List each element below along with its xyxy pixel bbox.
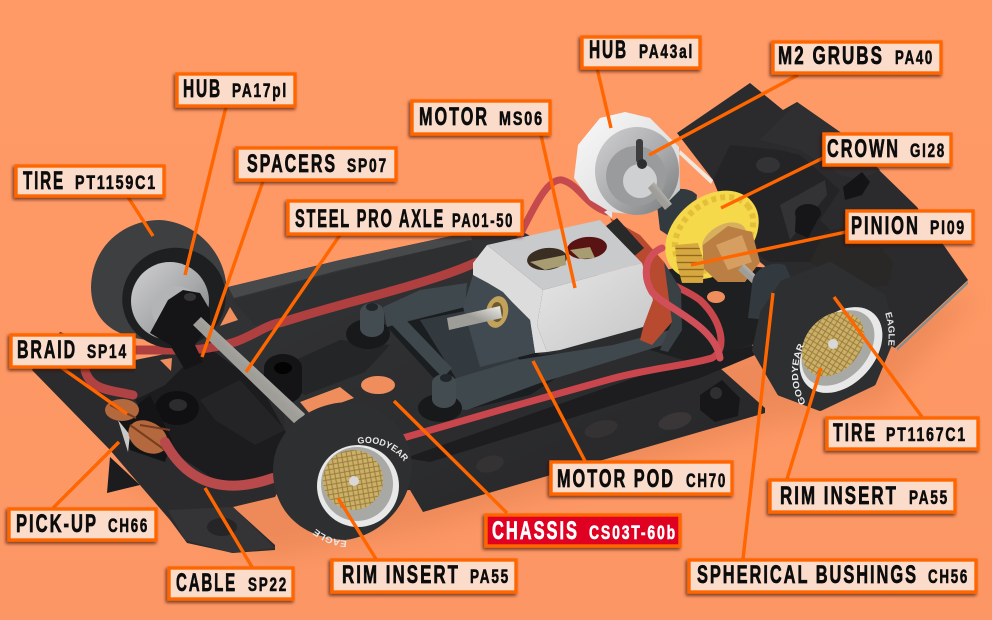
left bushing: [657, 189, 697, 238]
label: rim insert left: RIM INSERT: [342, 561, 460, 589]
front axle stub: [738, 264, 762, 287]
post with hole: [264, 354, 302, 404]
leader: crown: [721, 158, 823, 208]
leader: tire PT1159C1: [128, 197, 153, 236]
label: rim insert right: PA55: [909, 488, 949, 509]
tire lettering: [358, 443, 408, 468]
red cable: motor to brush up: [520, 180, 607, 235]
label: chassis: [486, 515, 680, 546]
label: tire PT1167C1: TIRE: [833, 419, 877, 447]
pinion gear: [675, 243, 704, 283]
tire lettering: [798, 342, 806, 403]
rear wheel: [91, 220, 240, 370]
leader: spacers: [202, 181, 263, 357]
label: rim insert right: RIM INSERT: [780, 482, 898, 510]
motor pod cradle: [387, 307, 600, 410]
lower plate rail: [405, 345, 755, 462]
label: hub PA17pl: PA17pl: [232, 81, 288, 102]
label: M2 grubs: PA40: [895, 48, 934, 69]
leader: pinion: [691, 232, 846, 265]
spherical bushing: [748, 264, 792, 320]
front wheel left: [273, 402, 412, 548]
motor end bracket: [610, 218, 672, 345]
label: rim insert left: PA55: [470, 567, 510, 588]
label: spacers: SPACERS: [247, 150, 337, 178]
label: crown: GI28: [910, 141, 946, 162]
label: pinion: PINION: [851, 212, 920, 240]
label: braid: SP14: [87, 342, 128, 363]
label: tire PT1159C1: PT1159C1: [75, 173, 157, 194]
front wheel right: GOODYEAR: [792, 344, 805, 404]
rear wing plate: [677, 83, 968, 348]
label: spherical bushings: CH56: [928, 567, 969, 588]
red cable: rear rail: [130, 262, 477, 350]
leader: hub PA43al: [597, 68, 611, 128]
gear collar and brass holder: [696, 215, 752, 265]
rear axle: [193, 317, 305, 426]
label: hub PA17pl: [177, 74, 295, 106]
plate under gears: [645, 262, 770, 362]
front wheel right: [752, 262, 895, 411]
label: motor: MOTOR: [419, 103, 489, 131]
label: pick-up: CH66: [108, 516, 149, 537]
pick-up screw: [155, 391, 199, 425]
motor end bell: [463, 275, 535, 367]
label: M2 grubs: M2 GRUBS: [778, 42, 884, 70]
label: cable: SP22: [248, 575, 288, 596]
plate oval recesses: [657, 409, 693, 433]
label: motor pod: CH70: [686, 471, 727, 492]
front mount post: [700, 380, 740, 422]
leader: cable: [205, 488, 252, 567]
front bumper wing: [32, 332, 290, 553]
rear wing raised blocks: [760, 102, 880, 180]
leader: rim insert right: [787, 368, 821, 479]
leader: hub PA17pl: [185, 107, 226, 275]
label: tire PT1167C1: [827, 418, 978, 449]
small notches of background: [220, 307, 238, 326]
red cable: lower run: [403, 262, 721, 438]
label: hub PA43al: HUB: [589, 36, 628, 64]
leader: braid: [62, 368, 127, 414]
pod post front: [418, 394, 462, 422]
leader: chassis: [394, 401, 507, 513]
label: braid: BRAID: [17, 336, 77, 364]
leader: pick-up: [53, 442, 119, 508]
front wheel left: GOODYEAR: [358, 436, 408, 462]
front wheel right: EAGLE: [885, 312, 895, 346]
leader: motor pod: [533, 361, 585, 461]
guide area block: [135, 345, 290, 490]
label: tire PT1159C1: [16, 166, 164, 196]
pod post rear: [346, 319, 390, 349]
label: steel pro axle: PA01-50: [452, 211, 514, 232]
leader: motor: [541, 135, 575, 288]
leader: M2 grubs: [649, 75, 798, 155]
label: chassis: CHASSIS: [492, 517, 579, 545]
motor windows: [526, 246, 568, 272]
leader: rim insert left: [338, 498, 376, 559]
motor shaft: [447, 306, 502, 330]
label: hub PA17pl: HUB: [183, 75, 222, 103]
rear upright: [150, 290, 210, 370]
front wheel left: EAGLE: [312, 528, 346, 548]
car chassis illustration: [32, 83, 968, 553]
label: pick-up: PICK-UP: [16, 510, 98, 538]
crown gear: [648, 172, 776, 298]
label: tire PT1159C1: TIRE: [23, 167, 65, 195]
label: motor pod: MOTOR POD: [557, 465, 675, 493]
label: motor: MS06: [499, 109, 544, 130]
chassis holes: [361, 376, 395, 394]
motor can: [473, 220, 653, 353]
leader: spherical bushings: [743, 293, 773, 559]
rear hub disc: [574, 112, 680, 215]
plate inner recess outline: [262, 340, 390, 395]
label: motor: [412, 101, 550, 134]
label: crown: CROWN: [827, 135, 900, 163]
motor wire over bracket: [646, 248, 720, 358]
label: pinion: PI09: [930, 218, 966, 239]
label: chassis: CS03T-60b: [589, 523, 677, 544]
label: steel pro axle: STEEL PRO AXLE: [295, 205, 445, 233]
braid pick-up: [85, 370, 273, 486]
rear wing small posts: [843, 172, 870, 200]
leader: tire PT1167C1: [834, 297, 922, 417]
car shadow: [110, 295, 975, 558]
label: braid: [11, 335, 134, 367]
label: hub PA43al: PA43al: [639, 42, 694, 63]
label: cable: CABLE: [176, 569, 237, 597]
leader: steel pro axle: [246, 235, 340, 372]
label: hub PA43al: [582, 36, 700, 68]
label: spacers: SP07: [347, 156, 388, 177]
main chassis plate: [190, 230, 765, 512]
